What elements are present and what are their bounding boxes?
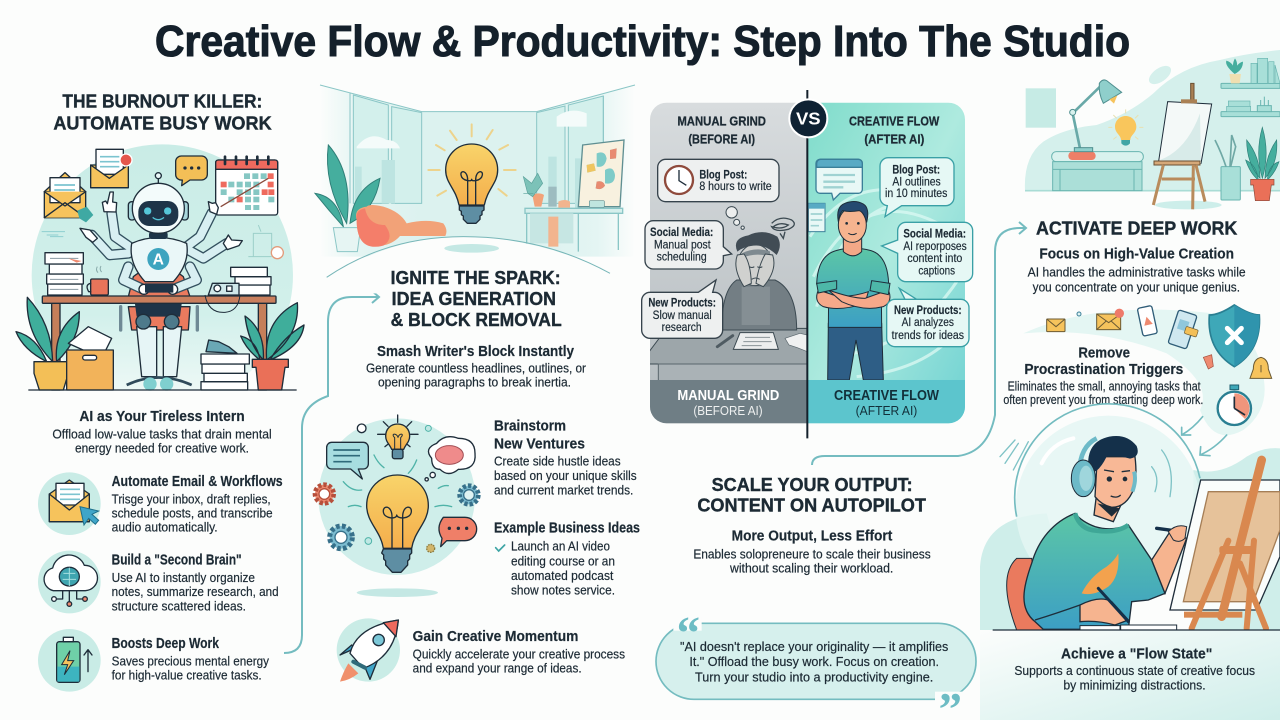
gears (315, 485, 478, 552)
thought bubbles (726, 207, 794, 238)
head (156, 176, 160, 187)
panel: activate deep work (1025, 50, 1280, 295)
head (1095, 457, 1136, 507)
text block: AI as your tireless intern: AI as Your Tireless Intern (79, 409, 245, 425)
sweater (1024, 513, 1165, 629)
text block: example business ideas: Example Business Ideas (494, 520, 640, 536)
arrow: scale to deep work (812, 222, 1026, 465)
headphones (1078, 436, 1098, 462)
text block: smash writer's block: Generate countless headlines, outlines, or (366, 360, 587, 375)
callout: new products after (887, 288, 969, 347)
plant right (241, 303, 304, 390)
text block: smash writer's block: Smash Writer's Block Instantly (377, 344, 575, 360)
heading: ignite the spark: IDEA GENERATION (392, 288, 556, 309)
text block: more output less effort (693, 529, 931, 576)
badge: VS: VS (796, 109, 821, 129)
arrow: burnout to spark (284, 291, 379, 653)
icon: glowing bulb (428, 124, 516, 223)
list item: automate email (112, 474, 283, 535)
chair (1007, 558, 1043, 630)
text block: example business ideas: editing course or an (511, 554, 615, 569)
list item: second brain (112, 553, 279, 613)
legs (137, 327, 182, 377)
list item: automate email: Trisge your inbox, draft replies, (112, 491, 271, 506)
device and right stack (231, 267, 271, 295)
callout: quote: "AI doesn't replace your originality — it amplifies (680, 639, 949, 654)
plants right (1215, 127, 1279, 201)
text block: flow state: by minimizing distractions. (1063, 677, 1206, 692)
callout: new products before: research (662, 320, 702, 334)
list item: boosts deep work (112, 636, 269, 682)
icon: envelope top (91, 149, 132, 188)
text block: flow state: Supports a continuous state of creative focus (1014, 663, 1255, 678)
text block: gain creative momentum: and expand your range of ideas. (413, 660, 582, 675)
paper and pen (733, 333, 778, 349)
panel: procrastination and flow state (980, 305, 1280, 720)
icon: lamp (1070, 80, 1122, 152)
shelves (1221, 58, 1280, 117)
shorts (135, 304, 182, 317)
books right (201, 354, 249, 390)
text block: example business ideas: automated podcast (511, 568, 614, 583)
callout: new products after: New Products: (894, 303, 962, 317)
chair (128, 267, 190, 297)
callout: blog post after: AI outlines (892, 174, 941, 188)
table and painting (523, 140, 624, 252)
table (1052, 152, 1143, 191)
list item: second brain: structure scattered ideas. (112, 598, 246, 613)
callout: new products after: AI analyzes (902, 315, 954, 329)
callout: quote: Turn your studio into a productivity engine. (695, 670, 933, 685)
text block: more output less effort: Enables solopreneure to scale their business (693, 546, 931, 561)
callout: new products before: New Products: (648, 296, 716, 310)
list item: boosts deep work: Boosts Deep Work (112, 636, 220, 652)
callout: social media before: scheduling (657, 250, 707, 264)
heading: burnout killer: AUTOMATE BUSY WORK (53, 113, 272, 134)
bubbles (327, 424, 477, 547)
callout: quote: “ (677, 607, 700, 659)
illustration: desk with lamp and easel (1025, 50, 1280, 209)
left side: manual grind (642, 103, 807, 423)
callout: social media before: Social Media: (650, 225, 713, 239)
background blobs (980, 310, 1280, 720)
panel: brainstorm and momentum (315, 415, 640, 682)
icon: stopwatch (1218, 385, 1251, 425)
heading: ignite the spark: IGNITE THE SPARK: (391, 267, 561, 288)
text block: gain creative momentum: Gain Creative Momentum (413, 629, 578, 645)
callout: social media before (645, 221, 732, 269)
text block: flow state: Achieve a "Flow State" (1061, 646, 1212, 662)
icon: envelope left (44, 173, 93, 222)
heading: burnout killer (53, 91, 272, 134)
icon: small bulb (1108, 109, 1143, 146)
mug (91, 279, 108, 295)
arms (92, 213, 227, 289)
text block: remove procrastination triggers: often prevent you from starting deep work. (1003, 392, 1203, 407)
small bulb (378, 415, 418, 459)
text block: remove procrastination triggers: Eliminates the small, annoying tasks that (1008, 379, 1201, 394)
list item: automate email: audio automatically. (112, 520, 218, 535)
footer label right: CREATIVE FLOW (834, 388, 939, 404)
robot: A (153, 251, 164, 268)
left side: manual grind: MANUAL GRIND (677, 114, 766, 129)
footer label left (677, 388, 779, 418)
callout: blog post after: Blog Post: (892, 162, 940, 176)
text block: AI as your tireless intern: Offload low-value tasks that drain mental (52, 426, 272, 441)
callout: blog post before: 8 hours to write (699, 179, 772, 193)
panel: before vs after comparison (642, 90, 973, 438)
icon: browser windows (808, 159, 862, 232)
heading: burnout killer: THE BURNOUT KILLER: (62, 91, 262, 112)
callout: social media after: Social Media: (903, 226, 966, 240)
icon: shield (1209, 305, 1260, 367)
list item: boosts deep work: for high-value creative tasks. (112, 667, 262, 682)
paper stack left (45, 253, 83, 295)
plant left (16, 297, 79, 390)
right side: creative flow: (AFTER AI) (864, 131, 924, 146)
torso (131, 237, 187, 282)
illustration: multi-armed robot at desk (16, 144, 304, 406)
text block: example business ideas: show notes service. (511, 582, 615, 597)
icon: check mark (496, 545, 505, 551)
text block: more output less effort: More Output, Less Effort (732, 529, 892, 545)
list item: second brain: Use AI to instantly organize (112, 570, 255, 585)
icon: battery (38, 629, 101, 692)
list item: automate email: Automate Email & Workflows (112, 474, 283, 490)
panel: ignite the spark scene (315, 85, 635, 389)
text block: gain creative momentum (413, 629, 625, 675)
text block: smash writer's block: opening paragraphs to break inertia. (378, 374, 571, 389)
panel: scale your output (656, 474, 976, 720)
text block: remove procrastination triggers: Remove (1078, 345, 1130, 361)
callout: new products after: trends for ideas (892, 328, 964, 342)
text block: focus on high-value creation (1028, 246, 1246, 295)
heading: scale your output (697, 474, 927, 516)
heading: scale your output: SCALE YOUR OUTPUT: (712, 474, 913, 495)
callout: quote (656, 607, 976, 720)
text block: gain creative momentum: Quickly accelerate your creative process (413, 646, 625, 661)
callout: social media after (882, 222, 973, 282)
callout: new products before (642, 280, 723, 338)
robot (80, 173, 242, 391)
heading: activate deep work: ACTIVATE DEEP WORK (1036, 217, 1238, 238)
callout: social media before: Manual post (654, 238, 711, 252)
icon: calendar (216, 157, 278, 215)
text block: focus on high-value creation: AI handles the administrative tasks while (1028, 265, 1246, 280)
text block: smash writer's block (366, 344, 587, 389)
list item: automate email: schedule posts, and transcribe (112, 505, 273, 520)
icon: bell (1250, 357, 1272, 378)
callout: quote: It." Offload the busy work. Focus on creation. (689, 654, 939, 669)
panel: tireless intern (38, 409, 283, 692)
text block: AI as your tireless intern (52, 409, 272, 455)
text block: brainstorm new ventures: New Ventures (494, 436, 585, 452)
badge: VS (789, 99, 827, 137)
callout: blog post before (658, 159, 779, 202)
icon: second brain (38, 551, 101, 613)
text block: remove procrastination triggers: Procrastination Triggers (1024, 362, 1183, 378)
footer label left: MANUAL GRIND (677, 388, 779, 404)
person (1024, 436, 1187, 629)
heading: ignite the spark (391, 267, 562, 330)
left side: manual grind: (BEFORE AI) (688, 131, 755, 146)
arrows: distractions deflected (1182, 417, 1227, 456)
text block: example business ideas: Launch an AI video (511, 539, 610, 554)
forearm (1152, 532, 1187, 593)
heading: scale your output: CONTENT ON AUTOPILOT (697, 495, 927, 516)
heading: ignite the spark: & BLOCK REMOVAL (391, 309, 562, 330)
text block: example business ideas (494, 520, 640, 597)
illustration: idea bulb cluster (315, 415, 478, 597)
callout: new products before: Slow manual (653, 308, 712, 322)
stylus and hand (1157, 528, 1182, 532)
text block: more output less effort: without scaling their workload. (729, 561, 893, 576)
desk and props (16, 253, 304, 390)
confident person (817, 201, 890, 380)
stressed person (722, 232, 797, 330)
panel: burnout killer (16, 91, 304, 406)
callout: blog post after: in 10 minutes (885, 186, 947, 200)
icon: speech bubble (176, 156, 207, 186)
text block: focus on high-value creation: you concentrate on your unique genius. (1033, 280, 1240, 295)
text block: remove procrastination triggers (1003, 345, 1203, 407)
list item: second brain: notes, summarize research, and (112, 584, 279, 599)
icon: rocket (337, 618, 400, 682)
dome (320, 237, 635, 293)
text block: brainstorm new ventures: Create side hustle ideas (494, 454, 621, 469)
callout: blog post after (880, 158, 954, 217)
callout: blog post before: Blog Post: (699, 167, 747, 181)
right side: creative flow: CREATIVE FLOW (849, 114, 940, 129)
footer label left: (BEFORE AI) (693, 403, 763, 418)
text block: brainstorm new ventures: Brainstorm (494, 419, 566, 435)
text block: brainstorm new ventures: based on your unique skills (494, 468, 637, 483)
desk (647, 328, 807, 364)
main bulb (367, 475, 428, 572)
file box (67, 327, 113, 390)
text block: flow state (1014, 646, 1255, 692)
illustration: studio with lightbulb (315, 85, 635, 293)
title: Creative Flow & Productivity: Step Into The Studio (155, 17, 1130, 66)
footer label right (834, 388, 939, 418)
callout: social media after: captions (918, 263, 955, 277)
list item: second brain: Build a "Second Brain" (112, 553, 242, 569)
icon: easel (1153, 83, 1222, 209)
easel and canvas (1170, 460, 1280, 628)
illustration: artist in flow bubble (1000, 404, 1280, 630)
plant and sofa (315, 145, 446, 252)
callout: social media after: AI reporposes (903, 239, 967, 253)
list item: boosts deep work: Saves precious mental energy (112, 653, 269, 668)
text block: focus on high-value creation: Focus on High-Value Creation (1039, 246, 1234, 262)
footer label right: (AFTER AI) (856, 403, 917, 418)
icons: distractions (1047, 305, 1272, 425)
text block: AI as your tireless intern: energy needed for creative work. (75, 440, 249, 455)
text block: brainstorm new ventures (494, 419, 637, 497)
right side: creative flow (807, 103, 973, 423)
callout: social media after: content into (907, 251, 962, 265)
text block: brainstorm new ventures: and current market trends. (494, 482, 633, 497)
footer bar right (807, 380, 965, 423)
neck and face (1093, 498, 1122, 522)
footer bar left (650, 380, 807, 423)
icon: email automation (38, 472, 101, 535)
